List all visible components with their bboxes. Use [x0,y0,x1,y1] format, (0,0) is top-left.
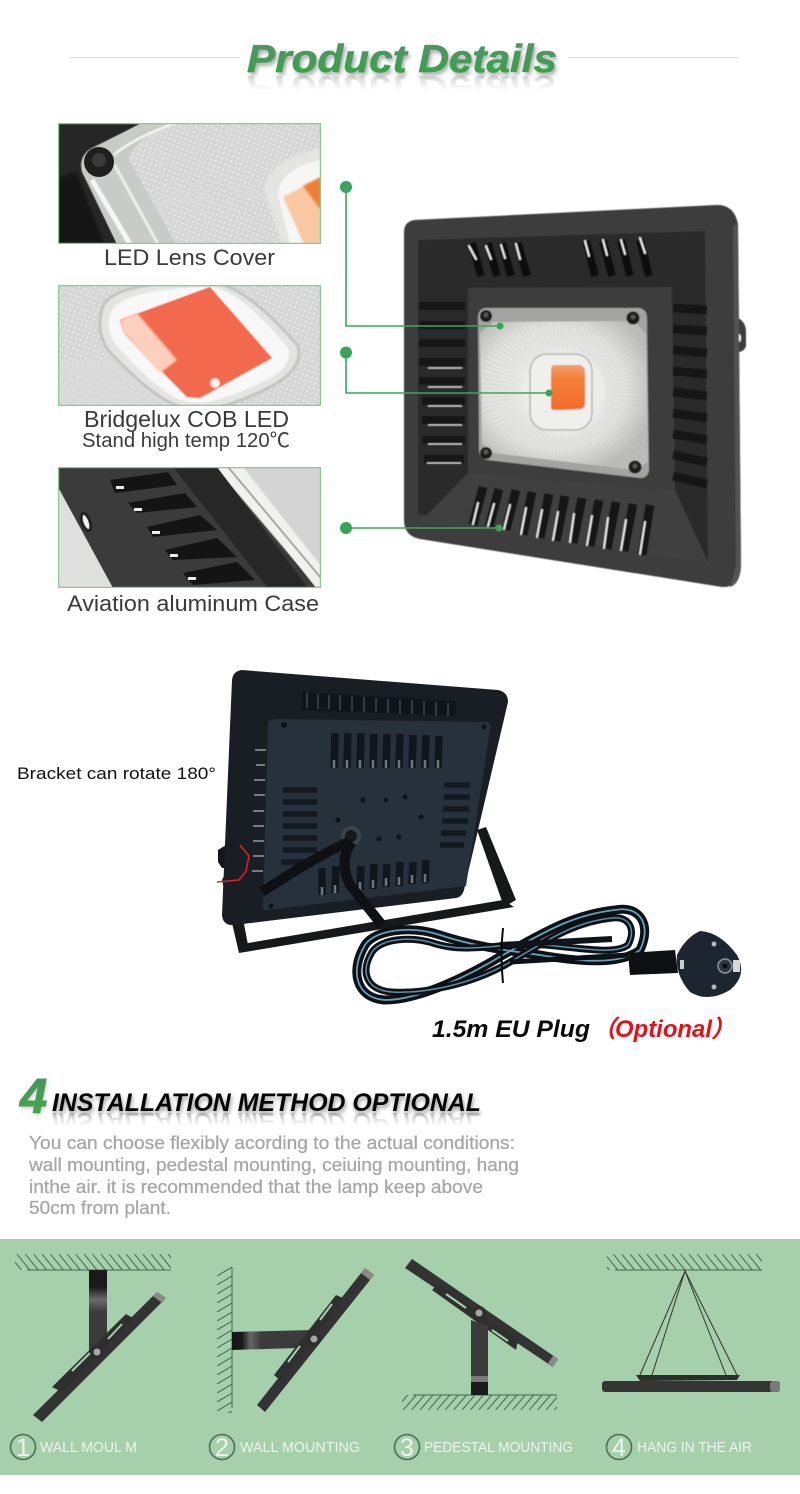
panel: aviation aluminum case photo [58,467,321,588]
heading: 4 Installation method optional [18,1078,482,1124]
label: 1.5m EU Plug (Optional): 1.5m EU Plug [432,1016,590,1043]
step label 3: PEDESTAL MOUNTING [394,1434,573,1462]
text block: installation description [28,1133,519,1218]
title: Product Details: Product Details [249,41,559,84]
title: Product Details [68,43,740,87]
callout: connector lines to the lens cover, COB LED and case [340,181,552,534]
diagram: hang in the air [602,1254,780,1392]
heading: 4 Installation method optional: 4 [19,1070,47,1124]
title: Product Details: Product Details [247,38,557,81]
step label 4: HANG IN THE AIR [606,1434,752,1462]
text block: installation description: You can choose flexibly acording to the actual conditions: [29,1133,515,1153]
step label 3: PEDESTAL MOUNTING: PEDESTAL MOUNTING [424,1440,573,1456]
panel: installation methods band [0,1239,800,1475]
heading: 4 Installation method optional: 4 [20,1072,48,1126]
step label 4: HANG IN THE AIR: HANG IN THE AIR [637,1440,752,1456]
text block: installation description: inthe air. it is recommended that the lamp keep above [29,1177,483,1197]
label: 1.5m EU Plug (Optional): ） [711,1016,735,1043]
label: Stand high temp 120℃: Stand high temp 120℃ [82,430,290,452]
icon: front view of LED flood light [404,205,746,587]
step label 3: PEDESTAL MOUNTING: 3 [400,1434,414,1462]
heading: 4 Installation method optional: INSTALLATION METHOD OPTIONAL [52,1107,481,1135]
diagram: wall mount from ceiling [15,1254,171,1422]
diagram: wall mounting [217,1267,374,1413]
step label 1: WALL MOUL M: WALL MOUL M [40,1440,137,1456]
text block: installation description: wall mounting, pedestal mounting, ceiuing mounting, hang [28,1155,519,1175]
step label 1: WALL MOUL M: 1 [16,1434,30,1462]
step label 4: HANG IN THE AIR: 4 [612,1434,626,1462]
label: Bracket can rotate 180°: Bracket can rotate 180° [17,765,216,783]
text block: installation description: 50cm from plant. [29,1198,171,1218]
panel: Bridgelux COB LED photo [58,283,321,409]
label: 1.5m EU Plug (Optional): Optional [615,1016,713,1043]
step label 2: WALL MOUNTING: WALL MOUNTING [240,1440,360,1456]
heading: 4 Installation method optional: INSTALLATION METHOD OPTIONAL [52,1089,481,1117]
panel: LED lens cover photo [58,123,321,244]
icon: rear view of lamp with cable and plug [217,670,741,1000]
heading: 4 Installation method optional: INSTALLATION METHOD OPTIONAL [53,1092,482,1120]
title: Product Details: Product Details [247,67,557,110]
diagram: pedestal mounting [402,1259,558,1410]
label: Bridgelux COB LED: Bridgelux COB LED [84,406,289,432]
label: 1.5m EU Plug (Optional) [432,1016,735,1043]
label: LED Lens Cover: LED Lens Cover [104,245,275,270]
label: 1.5m EU Plug (Optional): （ [592,1016,620,1043]
step label 2: WALL MOUNTING: 2 [215,1434,229,1462]
step label 2: WALL MOUNTING [210,1434,360,1462]
label: Aviation aluminum Case: Aviation aluminum Case [67,591,319,616]
step label 1: WALL MOUL M [10,1434,137,1462]
